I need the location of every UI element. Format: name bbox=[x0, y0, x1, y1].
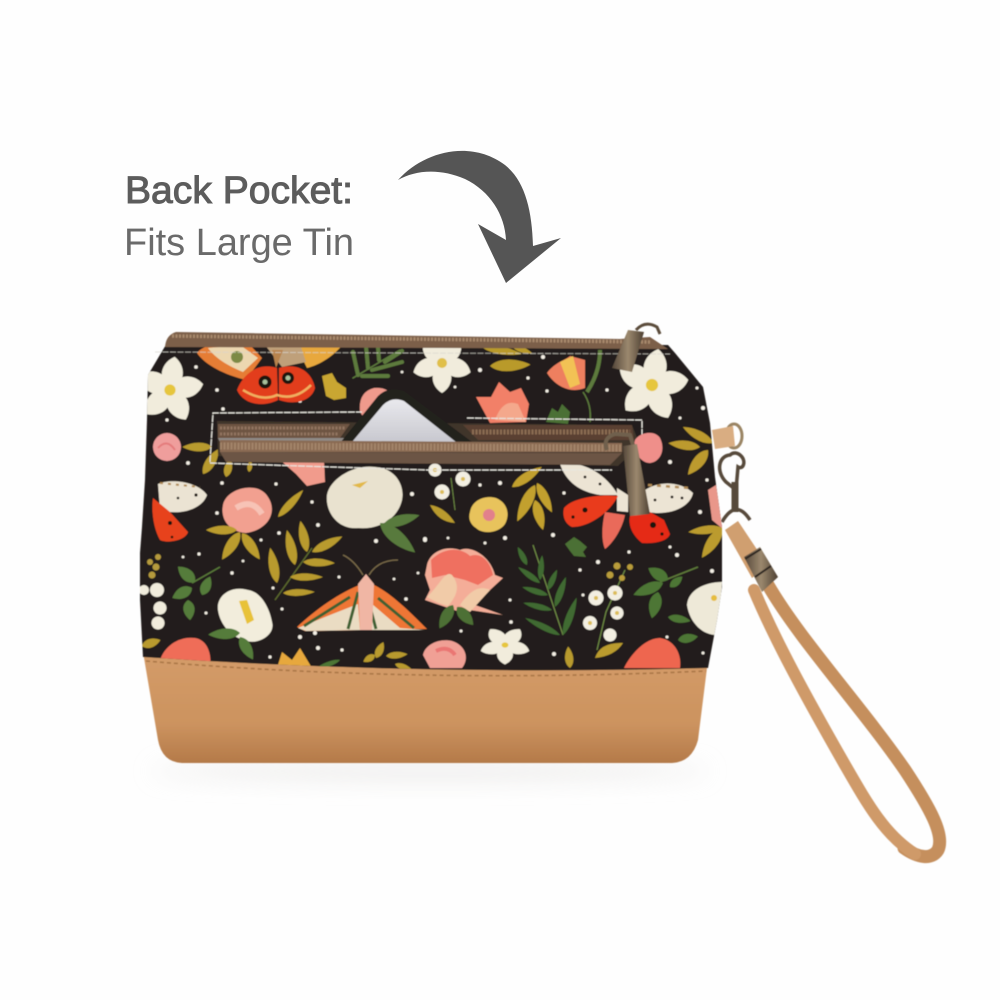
upper zipper right bbox=[463, 425, 634, 440]
tin mirror face bbox=[352, 399, 456, 442]
strap upper tab bbox=[725, 521, 768, 578]
lower zipper bbox=[220, 440, 622, 452]
strap front strand bbox=[754, 590, 915, 854]
right green sprig bbox=[631, 563, 698, 620]
tin inside pocket bbox=[340, 389, 472, 443]
right butterfly bbox=[560, 463, 693, 549]
pink flower bbox=[423, 640, 466, 668]
cream peony leaves bbox=[380, 513, 420, 553]
back pocket bbox=[210, 389, 662, 516]
right peony stamen bbox=[711, 595, 717, 601]
small white blossoms bbox=[428, 464, 470, 523]
pink rose by pocket zip bbox=[634, 433, 662, 463]
label line: Back Pocket: Back Pocket: bbox=[125, 170, 353, 212]
yellow sprig center bbox=[265, 520, 344, 600]
pink peony left bbox=[222, 488, 272, 533]
butterfly center bbox=[617, 488, 628, 512]
pink flower under pocket bbox=[280, 460, 325, 486]
butterfly upper left wing bbox=[560, 463, 618, 495]
top zipper pull bbox=[612, 330, 644, 372]
top green fern bbox=[353, 346, 402, 378]
center moth bbox=[297, 555, 427, 631]
moth cream lower wings bbox=[298, 604, 360, 631]
coral flower right bbox=[624, 638, 680, 668]
butterfly striped wing bbox=[602, 512, 625, 549]
bottom white flower bbox=[478, 626, 532, 664]
right peony green bbox=[667, 613, 699, 644]
upper zipper left bbox=[218, 424, 350, 438]
wristlet strap bbox=[712, 424, 940, 857]
red lower wings bbox=[237, 366, 278, 404]
top-center white flower bbox=[412, 347, 472, 394]
small green oak leaf bbox=[565, 537, 587, 557]
top moth bbox=[197, 342, 343, 404]
shadow under bag bbox=[150, 762, 710, 780]
bag bbox=[130, 324, 727, 763]
white peony lower left bbox=[218, 589, 273, 642]
small yellow flower bbox=[469, 497, 508, 532]
lower leaves bbox=[208, 628, 258, 662]
fabric print bbox=[130, 333, 727, 673]
left upper wing bbox=[197, 342, 262, 380]
top stitching bbox=[155, 352, 670, 354]
zipper tape bbox=[165, 332, 668, 349]
leather top stitching bbox=[146, 661, 706, 676]
ferrule ring line bbox=[745, 549, 771, 577]
lower coral flowers bbox=[160, 638, 680, 668]
lotus bbox=[476, 382, 529, 423]
clasp hook bbox=[720, 424, 750, 522]
moth body bbox=[358, 574, 374, 630]
yellow stamen bbox=[239, 600, 254, 624]
grey gap between zippers bbox=[218, 438, 350, 443]
strap back strand bbox=[768, 585, 940, 857]
label line: Fits Large Tin: Fits Large Tin bbox=[124, 222, 354, 264]
heading: back pocket label bbox=[124, 170, 354, 264]
green clump by stitching bbox=[546, 404, 570, 424]
pocket stitching bbox=[210, 412, 642, 470]
lower yellow sprigs bbox=[141, 636, 574, 673]
moth orange wings bbox=[297, 584, 362, 631]
arrow pointing to pocket bbox=[398, 151, 561, 283]
pocket zipper pull bbox=[623, 444, 650, 516]
left butterfly bbox=[152, 481, 207, 542]
moth stripes bbox=[304, 592, 414, 629]
confetti dots bbox=[165, 355, 714, 659]
right upper wing bbox=[300, 346, 340, 369]
metal ferrule bbox=[744, 547, 778, 592]
pocket-edge yellow leaves bbox=[182, 443, 253, 478]
butterfly red right wing bbox=[630, 512, 670, 543]
large cream peony bbox=[327, 467, 403, 528]
clasp body bbox=[732, 482, 738, 512]
right leaves by handle bbox=[668, 426, 712, 476]
yellow oak leaf bbox=[322, 373, 346, 400]
yellow leaves center right bbox=[511, 466, 553, 530]
pink flower at tin bbox=[360, 388, 390, 418]
cream peony stamen bbox=[352, 481, 368, 488]
green sprig left bbox=[170, 562, 220, 621]
carabiner bbox=[720, 453, 744, 490]
top zipper bbox=[155, 324, 670, 372]
top-left white flower bbox=[146, 356, 204, 420]
peony leaves bbox=[206, 487, 306, 563]
butterfly red left wing bbox=[563, 496, 618, 527]
tulip and stem bbox=[547, 350, 600, 422]
right white peony bbox=[687, 582, 722, 635]
clasp lower loop bbox=[722, 509, 750, 522]
coral flower left bbox=[160, 638, 210, 668]
tab ring bbox=[726, 424, 742, 448]
right pink sliver and yellow leaves bbox=[688, 485, 727, 561]
fabric body bbox=[140, 343, 722, 670]
pocket opening bbox=[217, 421, 640, 466]
left blossom spray bbox=[139, 554, 166, 630]
coral peony center bbox=[425, 548, 503, 631]
top-right white flower bbox=[619, 348, 689, 419]
lower zipper tape bbox=[220, 452, 622, 465]
leather base bbox=[143, 652, 708, 763]
top zipper pull ring bbox=[636, 324, 660, 334]
butterfly upper right wing bbox=[645, 484, 693, 513]
right spray of blossoms bbox=[583, 562, 633, 658]
top yellow leaves bbox=[483, 348, 532, 372]
yellow tulip bbox=[277, 648, 312, 668]
green fern bbox=[515, 545, 580, 638]
leather tab bbox=[712, 426, 735, 449]
pocket zipper pull ring bbox=[606, 434, 634, 450]
moth antennae bbox=[343, 555, 398, 575]
pink rose left bbox=[153, 433, 181, 461]
